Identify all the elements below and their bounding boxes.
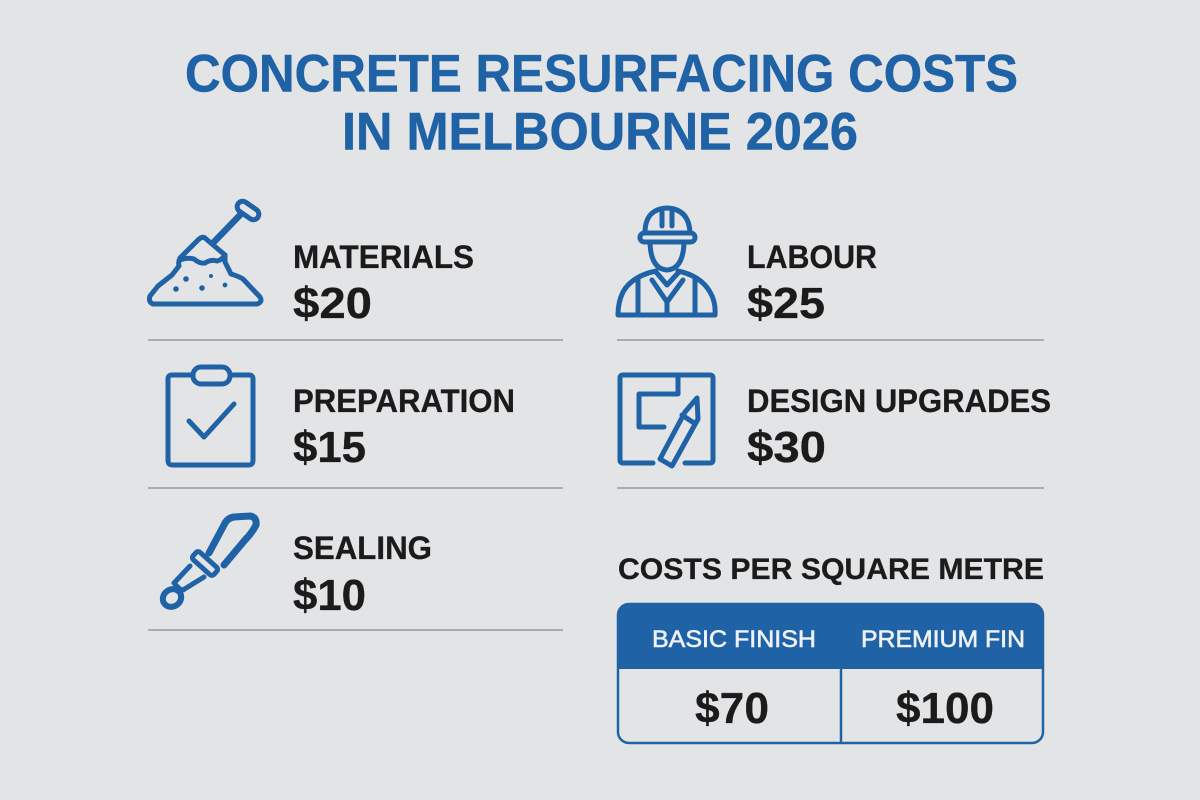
- value: preparation: $15: [293, 423, 366, 472]
- label: preparation: PREPARATION: [293, 383, 515, 419]
- value: sealing: $10: [293, 571, 366, 620]
- title: [185, 44, 1018, 162]
- value: materials: $20: [293, 279, 372, 328]
- heading: costs per square metre: COSTS PER SQUARE METRE: [618, 553, 1044, 586]
- value: premium finish: $100: [896, 684, 994, 733]
- icon: shovel in pile: [149, 199, 261, 304]
- value: design upgrades: $30: [747, 423, 826, 472]
- title: IN MELBOURNE 2026: [342, 102, 858, 162]
- title: CONCRETE RESURFACING COSTS: [185, 44, 1018, 104]
- label: labour: LABOUR: [747, 239, 877, 275]
- label: sealing: SEALING: [293, 530, 432, 566]
- table: finish costs: [618, 604, 1043, 743]
- header: basic finish: BASIC FINISH: [652, 626, 816, 653]
- panel: sealing: [159, 516, 432, 620]
- icon: clipboard with check: [168, 367, 253, 465]
- icon: sealing tool: [159, 516, 256, 610]
- value: labour: $25: [747, 279, 825, 328]
- panel: design upgrades: [620, 375, 1051, 472]
- panel: labour: [618, 208, 877, 328]
- icon: plan with pencil: [620, 375, 713, 466]
- panel: preparation: [168, 367, 515, 472]
- value: basic finish: $70: [695, 684, 769, 733]
- label: design upgrades: DESIGN UPGRADES: [747, 383, 1051, 419]
- label: materials: MATERIALS: [293, 239, 474, 275]
- panel: materials: [149, 199, 474, 328]
- header: premium finish: PREMIUM FIN: [861, 626, 1025, 653]
- icon: construction worker: [618, 208, 715, 315]
